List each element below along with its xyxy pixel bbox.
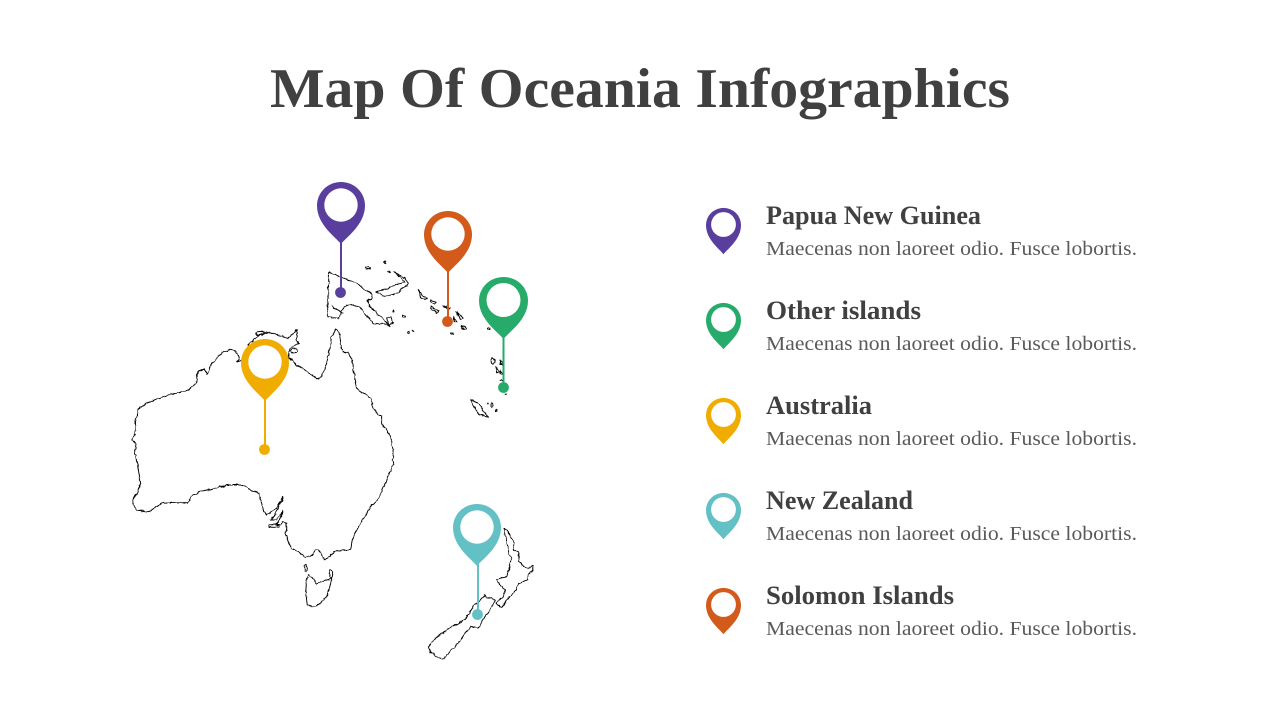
legend heading: Solomon Islands [766, 581, 954, 610]
legend icon: green pin [706, 303, 741, 349]
legend text: Maecenas non laoreet odio. Fusce lobortis. [766, 523, 1137, 545]
legend text: Maecenas non laoreet odio. Fusce lobortis. [766, 618, 1137, 640]
legend icon: yellow pin [706, 398, 741, 444]
map: Vanuatu [492, 357, 503, 381]
legend text: Maecenas non laoreet odio. Fusce lobortis. [766, 428, 1137, 450]
map of Oceania [132, 262, 533, 659]
pin: Papua New Guinea on map [317, 182, 365, 298]
legend icon: orange pin [706, 588, 741, 634]
legend item: Solomon Islands [706, 581, 1137, 640]
pin: Other islands on map [479, 277, 528, 393]
map: Papua New Guinea and islands [327, 262, 506, 417]
legend item: Australia [706, 391, 1137, 450]
legend heading: New Zealand [766, 486, 914, 515]
pin: Australia on map [241, 339, 289, 455]
map: New Caledonia [471, 399, 488, 417]
legend icon: teal pin [706, 493, 741, 539]
legend text: Maecenas non laoreet odio. Fusce lobortis. [766, 333, 1137, 355]
map: New Zealand [428, 528, 533, 659]
legend item: Other islands [706, 296, 1137, 355]
pin: Solomon Islands on map [424, 211, 472, 327]
legend heading: Papua New Guinea [766, 201, 981, 230]
legend heading: Australia [766, 391, 872, 420]
legend icon: purple pin [706, 208, 741, 254]
legend text: Maecenas non laoreet odio. Fusce lobortis. [766, 238, 1137, 260]
legend item: New Zealand [706, 486, 1137, 545]
legend heading: Other islands [766, 296, 921, 325]
pin: New Zealand on map [453, 504, 501, 620]
title: Map Of Oceania Infographics [270, 58, 1010, 120]
map: Australia [132, 329, 393, 607]
legend item: Papua New Guinea [706, 201, 1137, 260]
map: Tasmania [306, 574, 332, 607]
